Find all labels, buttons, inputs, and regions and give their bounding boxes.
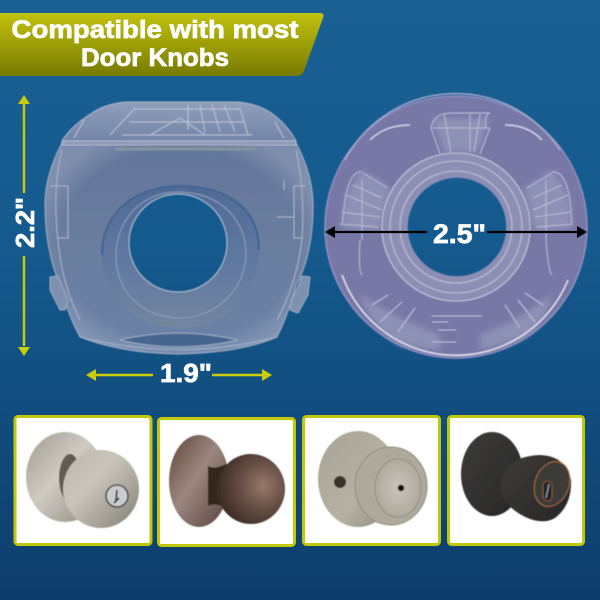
knob photo (26, 432, 139, 528)
tube around the hole (102, 186, 259, 328)
ribs: left (340, 172, 388, 275)
left side clip (50, 276, 68, 310)
hole rim (129, 194, 227, 292)
curved inner highlights (370, 125, 542, 140)
top dome ribs (74, 105, 284, 138)
base opening (120, 333, 238, 347)
card: dark bronze privacy knob (448, 416, 584, 544)
banner: compatibility heading (0, 13, 324, 76)
heading line 2: Door Knobs (81, 44, 229, 72)
ribs: right (527, 172, 572, 275)
card: pewter privacy knob (304, 416, 440, 544)
card: bronze ball knob (158, 418, 294, 546)
knob photo (169, 435, 285, 527)
ribs: top (431, 113, 490, 154)
product: front view of clear knob cover (325, 94, 587, 358)
disc (325, 96, 587, 358)
lower rim highlight (342, 275, 568, 355)
dimension: diameter 2.5 inches: 2.5" (433, 219, 486, 249)
knob photo (318, 431, 427, 527)
lighter rib panels (342, 118, 572, 350)
dimension: depth 1.9 inches: 1.9" (160, 358, 212, 388)
dimension: diameter 2.5 inches (325, 219, 587, 249)
knob photo (461, 432, 576, 521)
body edge glow (45, 143, 313, 354)
rim line (62, 141, 296, 145)
product: side view of clear knob cover (45, 102, 313, 354)
heading line 1: Compatible with most (12, 16, 299, 44)
right side clip (290, 276, 310, 313)
side highlights (50, 150, 306, 320)
dimension: height 2.2 inches (10, 95, 40, 356)
cover body (45, 143, 313, 354)
inner ring (381, 152, 531, 302)
dimension: height 2.2 inches: 2.2" (10, 197, 40, 248)
card: satin key-lock ball knob (15, 416, 151, 544)
dimension: depth 1.9 inches (86, 358, 272, 388)
ribs: bottom (372, 293, 543, 342)
cover top dome (62, 102, 296, 141)
